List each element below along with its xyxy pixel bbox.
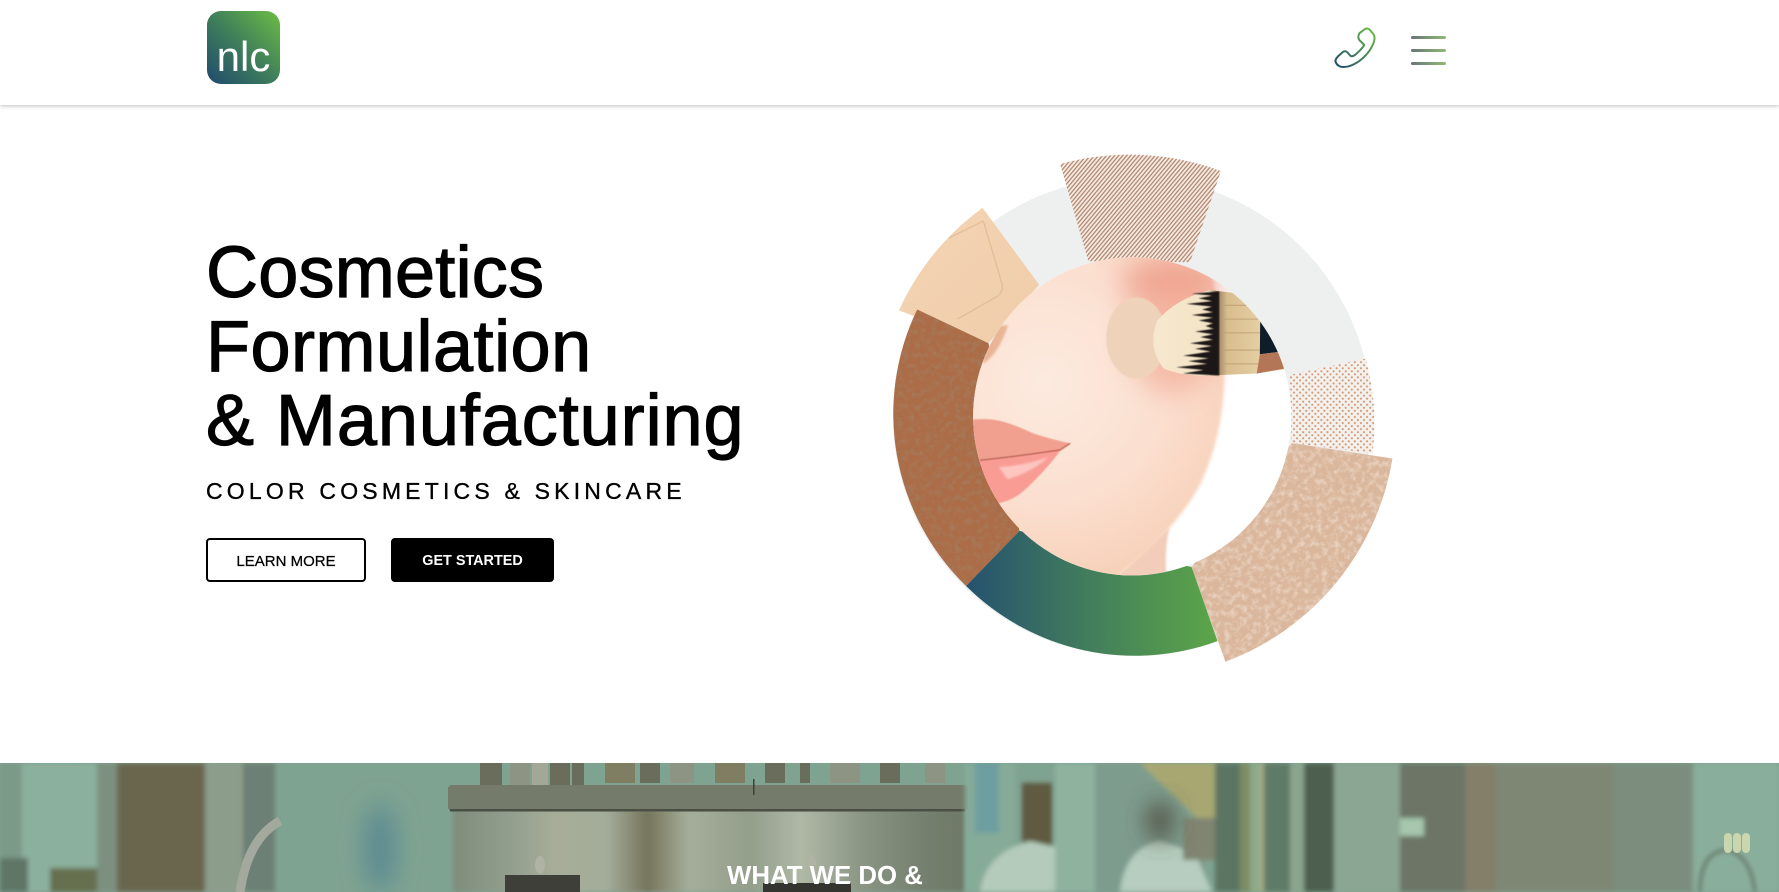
head blur [1148, 801, 1172, 841]
cheek skin [973, 257, 1226, 576]
segment: dotted swatch [1290, 359, 1374, 453]
bristle dark tips [1176, 292, 1219, 376]
gray base ring [893, 177, 1372, 656]
hero heading [206, 233, 745, 461]
brush bristles [1153, 290, 1286, 376]
hero heading: Formulation [206, 307, 592, 387]
left machinery [0, 763, 275, 892]
nose [983, 325, 1008, 364]
upper lip [968, 419, 1070, 461]
logo: nlc [207, 11, 280, 84]
subtitle: COLOR COSMETICS & SKINCARE [206, 478, 686, 504]
logo: nlc: nlc [217, 33, 270, 80]
button: get started: GET STARTED [422, 553, 523, 569]
neck [1120, 528, 1170, 576]
hero ring graphic [893, 154, 1392, 662]
segment: gradient green [966, 531, 1218, 656]
icon: phone [1334, 28, 1376, 68]
bristle fine streaks [1224, 304, 1260, 364]
hero heading: & Manufacturing [206, 381, 745, 461]
brush ferrule [1260, 322, 1278, 354]
segment: light powder [1192, 443, 1392, 662]
photo: face with brush [973, 257, 1284, 576]
steel tank [448, 763, 968, 892]
header bar [0, 0, 1779, 105]
blush [1121, 257, 1224, 305]
icon: hamburger menu [1411, 36, 1446, 65]
hero heading: Cosmetics [206, 233, 544, 313]
brush handle [1256, 352, 1284, 374]
segment: beige foundation swatch [899, 208, 1039, 343]
powder patch [1106, 297, 1167, 379]
lip highlight [999, 457, 1049, 479]
handle [240, 821, 280, 892]
segment: brown powder [893, 309, 1019, 586]
segment: striped wedge [1060, 155, 1221, 262]
blue blotch [364, 804, 396, 892]
button: get started [391, 538, 554, 582]
lip line [980, 443, 1070, 460]
section heading: what we do: WHAT WE DO & [727, 862, 923, 890]
button: learn more [206, 538, 366, 582]
cheek pink [1128, 278, 1218, 395]
inner white circle [973, 257, 1291, 575]
lower lip [980, 450, 1061, 504]
bottom band: factory photo [0, 763, 1779, 892]
button: learn more: LEARN MORE [236, 553, 336, 570]
right scene [965, 763, 1779, 892]
